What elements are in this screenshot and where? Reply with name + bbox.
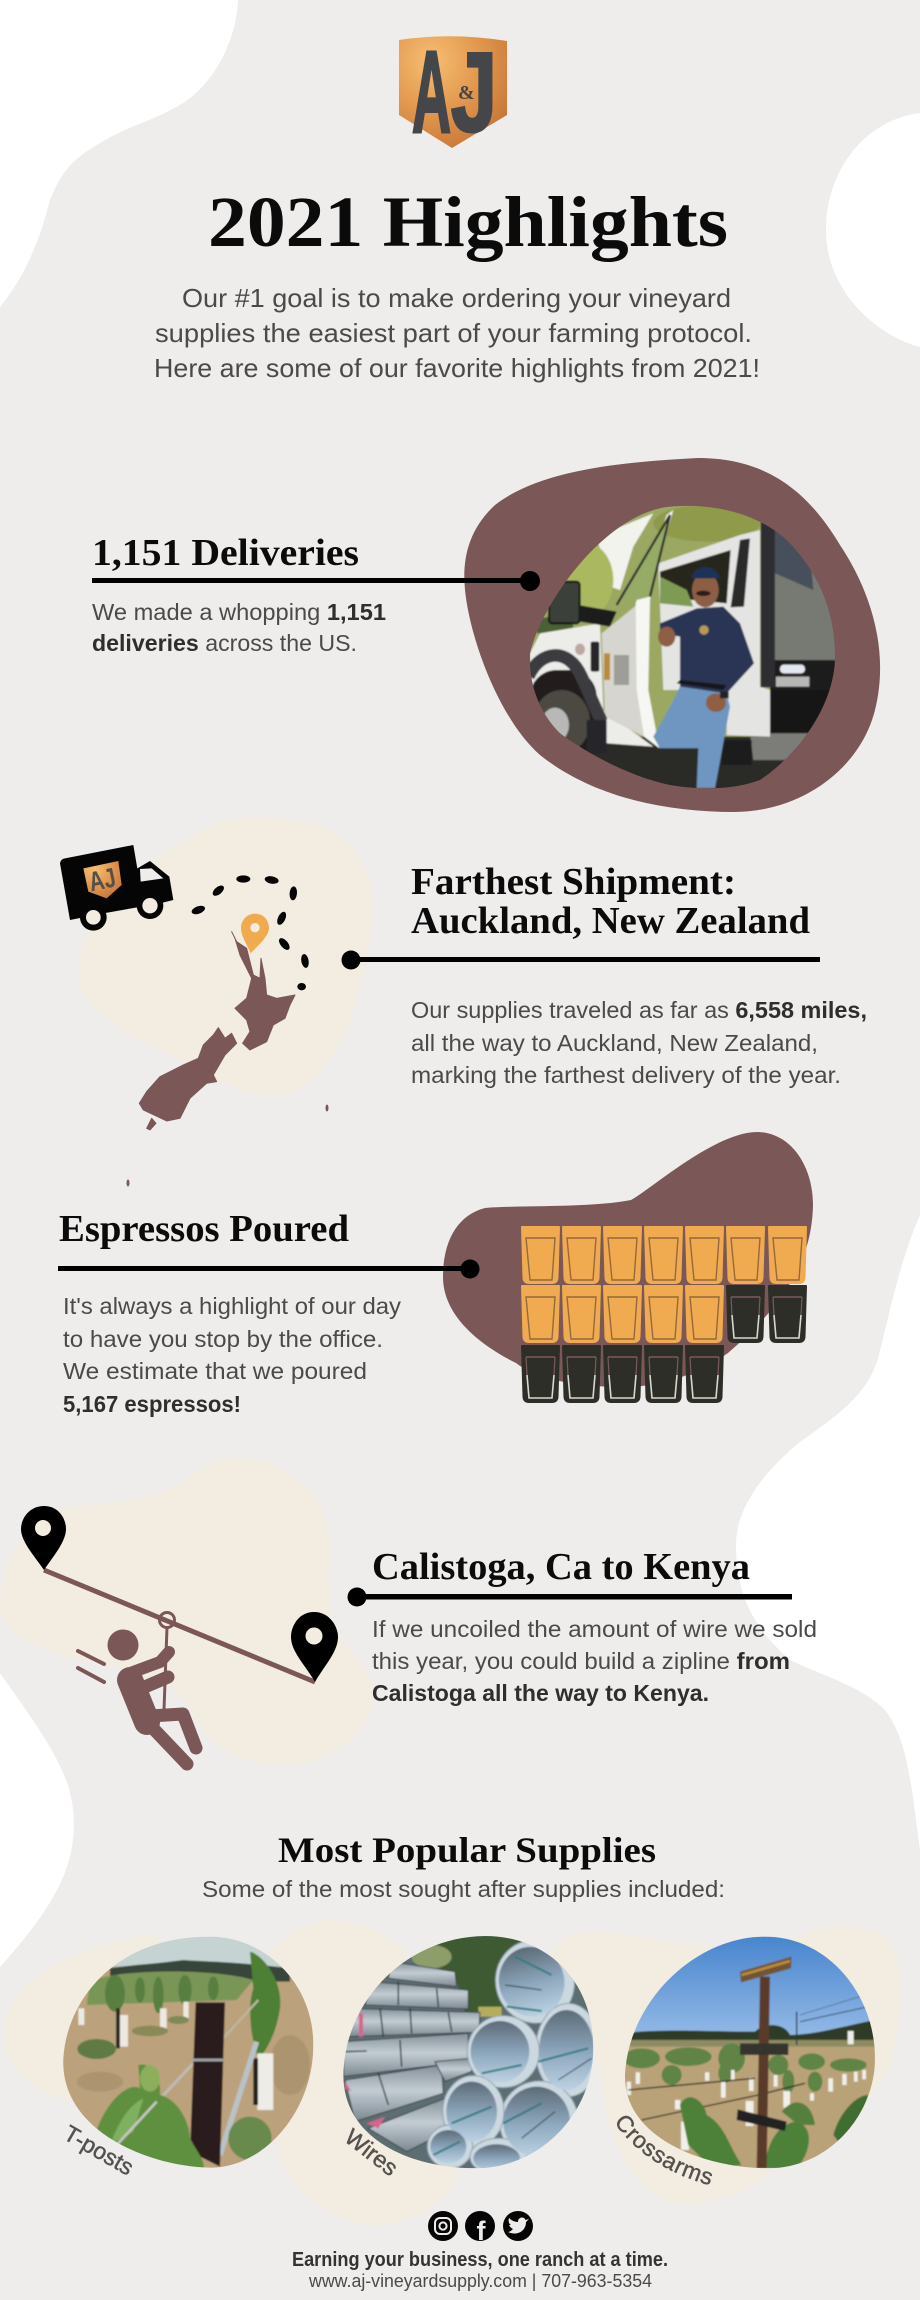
body text	[372, 1616, 817, 1706]
contact line: www.aj-vineyardsupply.com | 707-963-5354	[308, 2271, 652, 2291]
logo: A&J shield: J	[451, 30, 497, 155]
body text: all the way to Auckland, New Zealand,	[411, 1030, 818, 1056]
icon: facebook: f	[476, 2216, 486, 2246]
photo: wires	[343, 1936, 594, 2168]
icon: pin end	[291, 1612, 338, 1682]
body text: If we uncoiled the amount of wire we sold	[372, 1616, 817, 1642]
panel: zipline	[0, 1458, 817, 1765]
panel: espressos	[58, 1132, 813, 1417]
icon: instagram	[428, 2211, 458, 2241]
intro text: Our #1 goal is to make ordering your vineyard	[182, 283, 731, 313]
icon: location pin	[241, 914, 269, 953]
map: New Zealand	[139, 932, 295, 1130]
connector line	[348, 1588, 792, 1606]
illustration: zipline rider	[44, 1570, 315, 1764]
body text: marking the farthest delivery of the year.	[411, 1062, 841, 1088]
heading: Espressos Poured	[59, 1208, 349, 1250]
heading: Calistoga, Ca to Kenya	[372, 1546, 750, 1588]
dashed route	[190, 875, 310, 990]
panel: farthest shipment	[60, 817, 867, 1186]
heading: 1,151 Deliveries	[92, 532, 359, 574]
connector line	[92, 571, 540, 591]
body text: We estimate that we poured	[63, 1358, 367, 1384]
photo: crossarms	[625, 1936, 875, 2168]
body text: It's always a highlight of our day	[63, 1293, 402, 1319]
pictogram: espresso cups	[521, 1226, 807, 1403]
illustration: truck, route and map	[60, 845, 310, 1130]
icon: pin start	[21, 1506, 66, 1570]
intro text: supplies the easiest part of your farming protocol.	[155, 318, 752, 348]
photo: t-post	[63, 1936, 314, 2168]
brown blob	[443, 1132, 813, 1387]
body text: Calistoga all the way to Kenya.	[372, 1680, 709, 1706]
icon: delivery truck	[60, 845, 173, 931]
body text: 5,167 espressos!	[63, 1391, 241, 1417]
label: wires: Wires	[340, 2123, 403, 2181]
connector line	[58, 1260, 480, 1278]
tagline: Earning your business, one ranch at a time.	[292, 2249, 668, 2271]
icon: facebook	[465, 2211, 495, 2246]
label: t-posts: T-posts	[60, 2120, 138, 2180]
heading: Most Popular Supplies	[278, 1830, 656, 1870]
icon: delivery truck: AJ	[86, 861, 118, 897]
body text	[411, 997, 867, 1088]
body text: deliveries across the US.	[92, 630, 357, 656]
label: crossarms: Crossarms	[617, 2116, 712, 2184]
subheading: Some of the most sought after supplies included:	[202, 1876, 725, 1902]
beige blob	[79, 817, 374, 1095]
brown blob with truck photo	[464, 458, 880, 812]
title: 2021 Highlights	[208, 182, 728, 262]
body text	[63, 1293, 402, 1417]
body text	[92, 599, 386, 656]
panel: deliveries	[92, 458, 880, 812]
body text: We made a whopping 1,151	[92, 599, 386, 625]
intro text	[154, 283, 760, 383]
body text: Our supplies traveled as far as 6,558 miles,	[411, 997, 867, 1023]
heading: Farthest Shipment:	[411, 861, 736, 903]
body text: this year, you could build a zipline from	[372, 1648, 790, 1674]
logo: A&J shield: &	[458, 82, 475, 104]
intro text: Here are some of our favorite highlights from 2021!	[154, 353, 760, 383]
outlying islands	[126, 1104, 328, 1186]
body text: to have you stop by the office.	[63, 1326, 383, 1352]
logo: A&J shield: A	[412, 27, 451, 157]
heading: Auckland, New Zealand	[411, 900, 810, 942]
footer	[292, 2211, 668, 2291]
panel: most popular supplies	[3, 1830, 902, 2225]
connector line	[342, 950, 820, 970]
icon: twitter	[503, 2211, 533, 2241]
heading	[411, 861, 810, 942]
beige blobs	[3, 1920, 902, 2225]
beige blob	[0, 1458, 373, 1765]
